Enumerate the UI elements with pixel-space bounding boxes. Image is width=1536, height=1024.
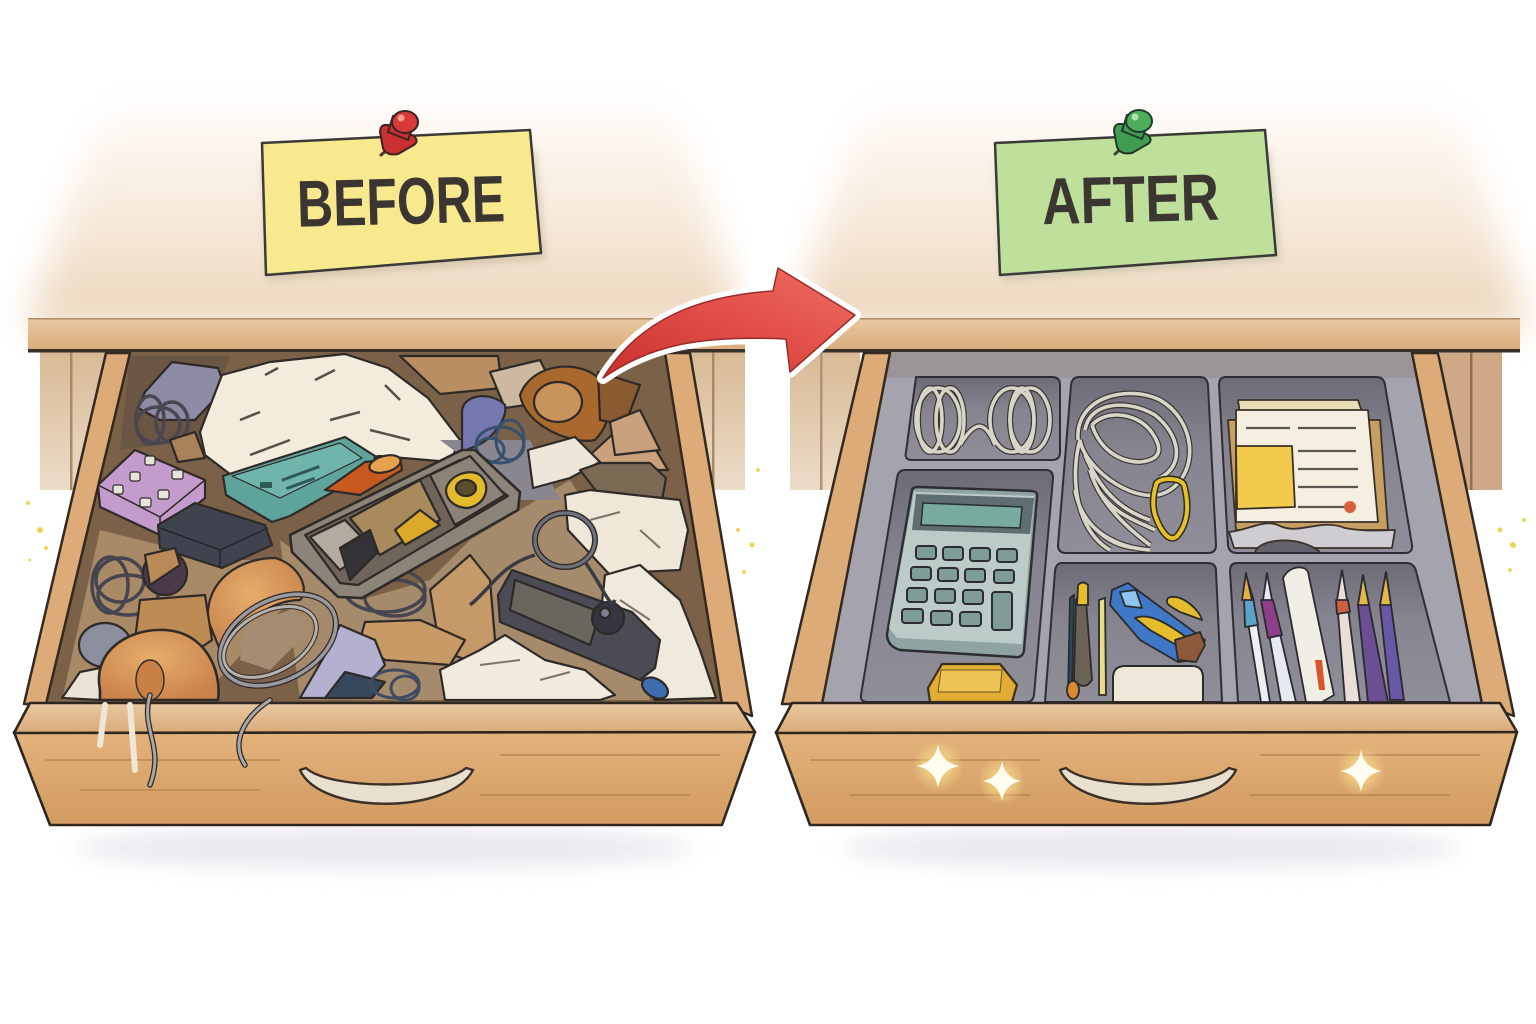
- drawer: before (messy): [14, 352, 755, 825]
- sticky note: AFTER: [995, 130, 1281, 281]
- floor shadow: after drawer: [840, 828, 1460, 868]
- desk top: after side: [790, 90, 1530, 330]
- front panel: before: [14, 732, 755, 825]
- compartment: pens: [1230, 563, 1450, 702]
- heading: AFTER: AFTER: [1041, 160, 1220, 238]
- white crumpled cloth bottom: [440, 635, 615, 700]
- purple box: [98, 450, 205, 535]
- white gap between desks: [748, 100, 786, 500]
- blue cord bundle: [371, 670, 419, 700]
- clutter pile: [62, 354, 716, 704]
- floor shadow: before drawer: [75, 828, 695, 868]
- red push pin: [380, 111, 418, 155]
- wood grain: [810, 755, 1480, 795]
- compartment: small items: [1045, 563, 1222, 702]
- left wall: before: [24, 353, 130, 704]
- drawer handle: after: [1060, 768, 1236, 804]
- multi-tool and clips: [1067, 582, 1106, 699]
- small silver object: [79, 623, 131, 667]
- blue tangled cords: [476, 420, 524, 463]
- compartment: top left cables: [906, 377, 1060, 460]
- orange trinket: [325, 458, 402, 495]
- curved arrow: before to after: [603, 268, 855, 378]
- top rim: before: [14, 703, 755, 733]
- green push pin: [1114, 110, 1152, 154]
- desk front edge: after side: [790, 318, 1520, 352]
- compartment: calculator: [861, 470, 1053, 702]
- tray back band: [885, 353, 1418, 378]
- small blue capsule: [638, 673, 672, 703]
- drawer interior: before: [45, 352, 722, 704]
- white cloth lower right: [600, 565, 716, 700]
- wood grain: [45, 755, 720, 795]
- calculator: [887, 487, 1037, 657]
- drawer: after (organised): [776, 353, 1517, 825]
- sparkle 3: [1336, 746, 1386, 796]
- white scrap bottom left: [62, 668, 100, 700]
- drawer handle: before: [300, 768, 473, 804]
- compartment: papers: [1219, 377, 1412, 553]
- sparkle 1: [912, 740, 964, 792]
- yellow cable clip: [1153, 479, 1187, 538]
- sparkle 2: [978, 757, 1026, 805]
- left wall: after: [782, 353, 890, 704]
- white paper scrap: [528, 437, 600, 488]
- heading: BEFORE: BEFORE: [296, 161, 506, 241]
- brown bags at back: [120, 356, 230, 450]
- tangled cord: top left: [136, 396, 188, 444]
- desk legs: before side: [40, 350, 745, 490]
- hanging cords: [100, 695, 270, 785]
- desk top: before side: [25, 90, 745, 330]
- small scissor loop: [470, 513, 615, 605]
- compartment: coiled cable: [1058, 377, 1216, 553]
- right wall: before: [665, 353, 752, 716]
- scrunched potato bag left: [208, 558, 304, 650]
- right wall: after: [1412, 353, 1514, 716]
- cord pile: [92, 557, 425, 616]
- desk legs: after side: [790, 350, 1502, 490]
- dark grey box: [158, 503, 272, 568]
- small white container: [1113, 666, 1203, 702]
- pens and pencils: [1242, 567, 1404, 702]
- rectangular organiser tray: [290, 450, 520, 598]
- blue bottle: [462, 396, 505, 452]
- grey cloth: [138, 362, 225, 420]
- large looped cord: [204, 576, 352, 704]
- coiled cable: [1075, 393, 1190, 550]
- large potato pouch: [99, 630, 219, 700]
- tray base: [818, 353, 1482, 704]
- dark pouch: [580, 463, 666, 500]
- crumple marks: [240, 368, 410, 455]
- teal box: [223, 437, 375, 522]
- paper holder: [1229, 523, 1395, 548]
- desk front edge: before side: [28, 318, 745, 352]
- sticky note: BEFORE: [262, 130, 546, 281]
- tan bag centre: [430, 555, 495, 665]
- coiled cable bundles: [916, 388, 1050, 452]
- lavender notebook: [300, 625, 385, 698]
- yellow sticky note: [1236, 446, 1295, 509]
- gold tape pack: [928, 664, 1017, 702]
- black camera: [498, 570, 660, 680]
- yellow dust specks: [26, 468, 1526, 574]
- stack of papers: [1228, 400, 1395, 552]
- top rim: after: [776, 703, 1517, 733]
- white cloth right: [565, 490, 688, 575]
- white crumpled cloth: [200, 354, 460, 478]
- blue stapler and yellow scissors: [1110, 583, 1205, 662]
- yellow tape: [446, 472, 486, 508]
- mid clutter fill: tan and grey scraps: [62, 530, 300, 700]
- front panel: after: [776, 732, 1517, 825]
- brown bundle top right: [520, 367, 609, 441]
